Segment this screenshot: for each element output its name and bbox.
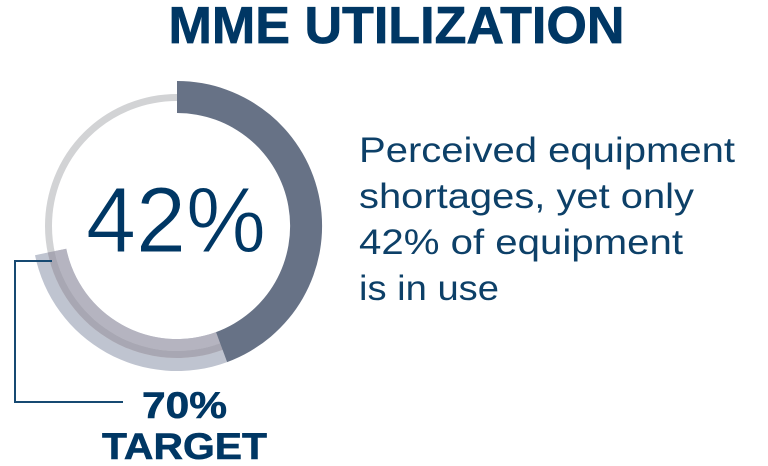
target label: 70%	[142, 385, 227, 426]
actual band: 42%	[177, 81, 322, 362]
target label	[102, 385, 267, 466]
target band: 70%	[35, 249, 227, 371]
inner target band tint	[48, 249, 223, 358]
target label: TARGET	[102, 426, 267, 466]
description text: Perceived equipment	[359, 131, 735, 170]
description text: shortages, yet only	[359, 177, 695, 216]
donut chart	[35, 81, 322, 371]
target leader line	[15, 261, 123, 402]
overlap of ring and target band	[48, 251, 223, 358]
background ring	[48, 98, 306, 354]
description text: 42% of equipment	[359, 223, 683, 262]
description text	[359, 131, 735, 308]
description text: is in use	[359, 269, 499, 308]
center value: 42%	[86, 168, 266, 272]
